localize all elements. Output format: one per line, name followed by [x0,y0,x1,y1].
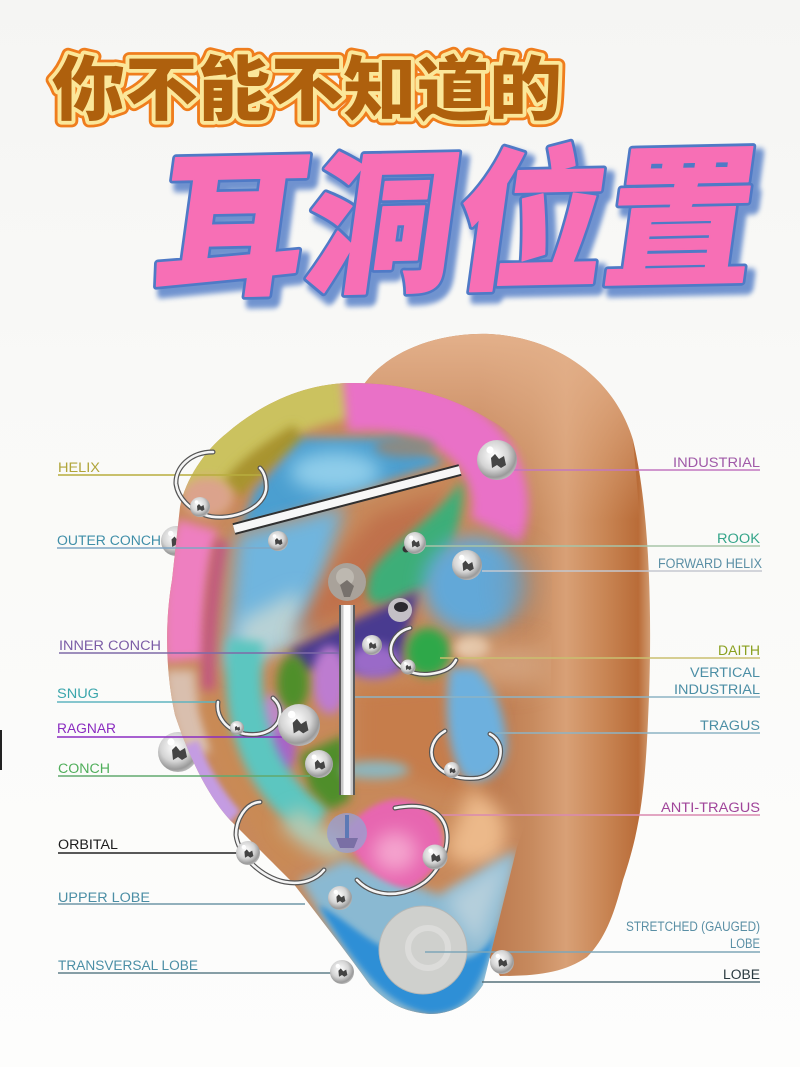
label: tragus: TRAGUS [700,718,760,733]
ragnar ball [278,704,320,746]
label: anti-tragus: ANTI-TRAGUS [661,800,760,815]
lobe back ball [490,950,514,974]
back of ear [360,334,650,976]
forward helix ball [452,550,482,580]
helix: pink band [345,403,500,530]
label: transversal lobe: TRANSVERSAL LOBE [58,958,198,973]
daith: green [406,628,450,676]
label: stretched gauged lobe [425,919,760,952]
inner pink-purple [312,646,348,714]
concha: upper blue [240,438,445,530]
rook: green [367,480,462,604]
helix: olive band [195,392,352,500]
blue wash below bar [341,761,409,779]
industrial bar [234,470,460,529]
concha: orange diagonal [290,490,450,640]
coloured ear front [167,383,549,1014]
label: vertical industrial [355,665,761,697]
left-edge mark [0,730,2,770]
ear illustration [140,334,650,1040]
transversal lobe ball [330,960,354,984]
forward helix: gray-blue fade [502,549,538,621]
label: vertical industrial: INDUSTRIAL [674,682,761,697]
concha: lower blue [225,505,345,670]
concha: orange-brown floor [357,680,470,790]
label: orbital: ORBITAL [58,837,119,852]
green cavum [300,735,350,810]
rook ball [402,532,426,554]
fold highlight [445,790,507,866]
label: upper lobe: UPPER LOBE [58,890,150,905]
stretched lobe plug [379,906,470,994]
label: stretched gauged lobe: STRETCHED (GAUGED) [626,919,760,934]
snug ring [218,698,280,735]
title: line one: 你不能不知道的 [52,51,562,129]
tan fold [470,645,550,685]
lobe: light triangle [445,855,512,950]
outer conch front ball [268,531,288,551]
back-of-ear light top [360,334,640,520]
concha: pale strip [232,590,300,670]
conch back ball [158,732,198,772]
forward helix: blue [423,537,523,633]
tragus: blue [447,668,507,781]
lobe: blue [300,850,517,1014]
jewellery behind ear [158,526,198,772]
dark green patch [277,655,309,711]
title: line one: 你不能不知道的 [52,51,562,129]
label: helix: HELIX [58,460,100,475]
conch ball [305,750,333,778]
helix ring [176,452,266,517]
label: rook: ROOK [717,531,760,546]
label: inner conch: INNER CONCH [59,638,161,653]
pale band [290,815,345,848]
anti-tragus: pink [345,799,443,888]
orbital ring [236,802,324,883]
label: outer conch: OUTER CONCH [57,533,161,548]
hole: dark purple [290,590,420,670]
label lines and text [57,455,762,982]
title: line two: 耳洞位置 [145,135,769,317]
helix: tan tip [181,477,233,517]
label: conch: CONCH [58,761,110,776]
title: line two: 耳洞位置 [145,135,769,317]
title: line one: 你不能不知道的 [52,51,562,129]
label: forward helix: FORWARD HELIX [658,556,762,571]
outer conch back ball [161,526,191,556]
label: industrial: INDUSTRIAL [673,455,761,470]
tragus ring [432,731,501,778]
upper lobe ball [328,886,352,910]
outer rim: tan and lavender [180,670,200,755]
title: line two: 耳洞位置 [152,142,775,324]
label: lobe: LOBE [723,967,760,982]
vertical industrial [327,563,367,853]
industrial ball [477,440,517,480]
outer rim: pink [184,525,198,660]
label: snug: SNUG [57,686,99,701]
label: vertical industrial: VERTICAL [690,665,761,680]
daith ring [391,628,456,674]
jewellery in front [176,440,517,994]
rim inner red-brown strip [208,540,222,690]
label: stretched gauged lobe: LOBE [730,936,760,951]
label: daith: DAITH [718,643,760,658]
label: ragnar: RAGNAR [57,721,116,736]
anti-tragus ring [357,806,448,894]
antihelix: teal band [244,640,320,822]
upper conch ball [388,598,412,622]
inner conch ball [362,635,382,655]
